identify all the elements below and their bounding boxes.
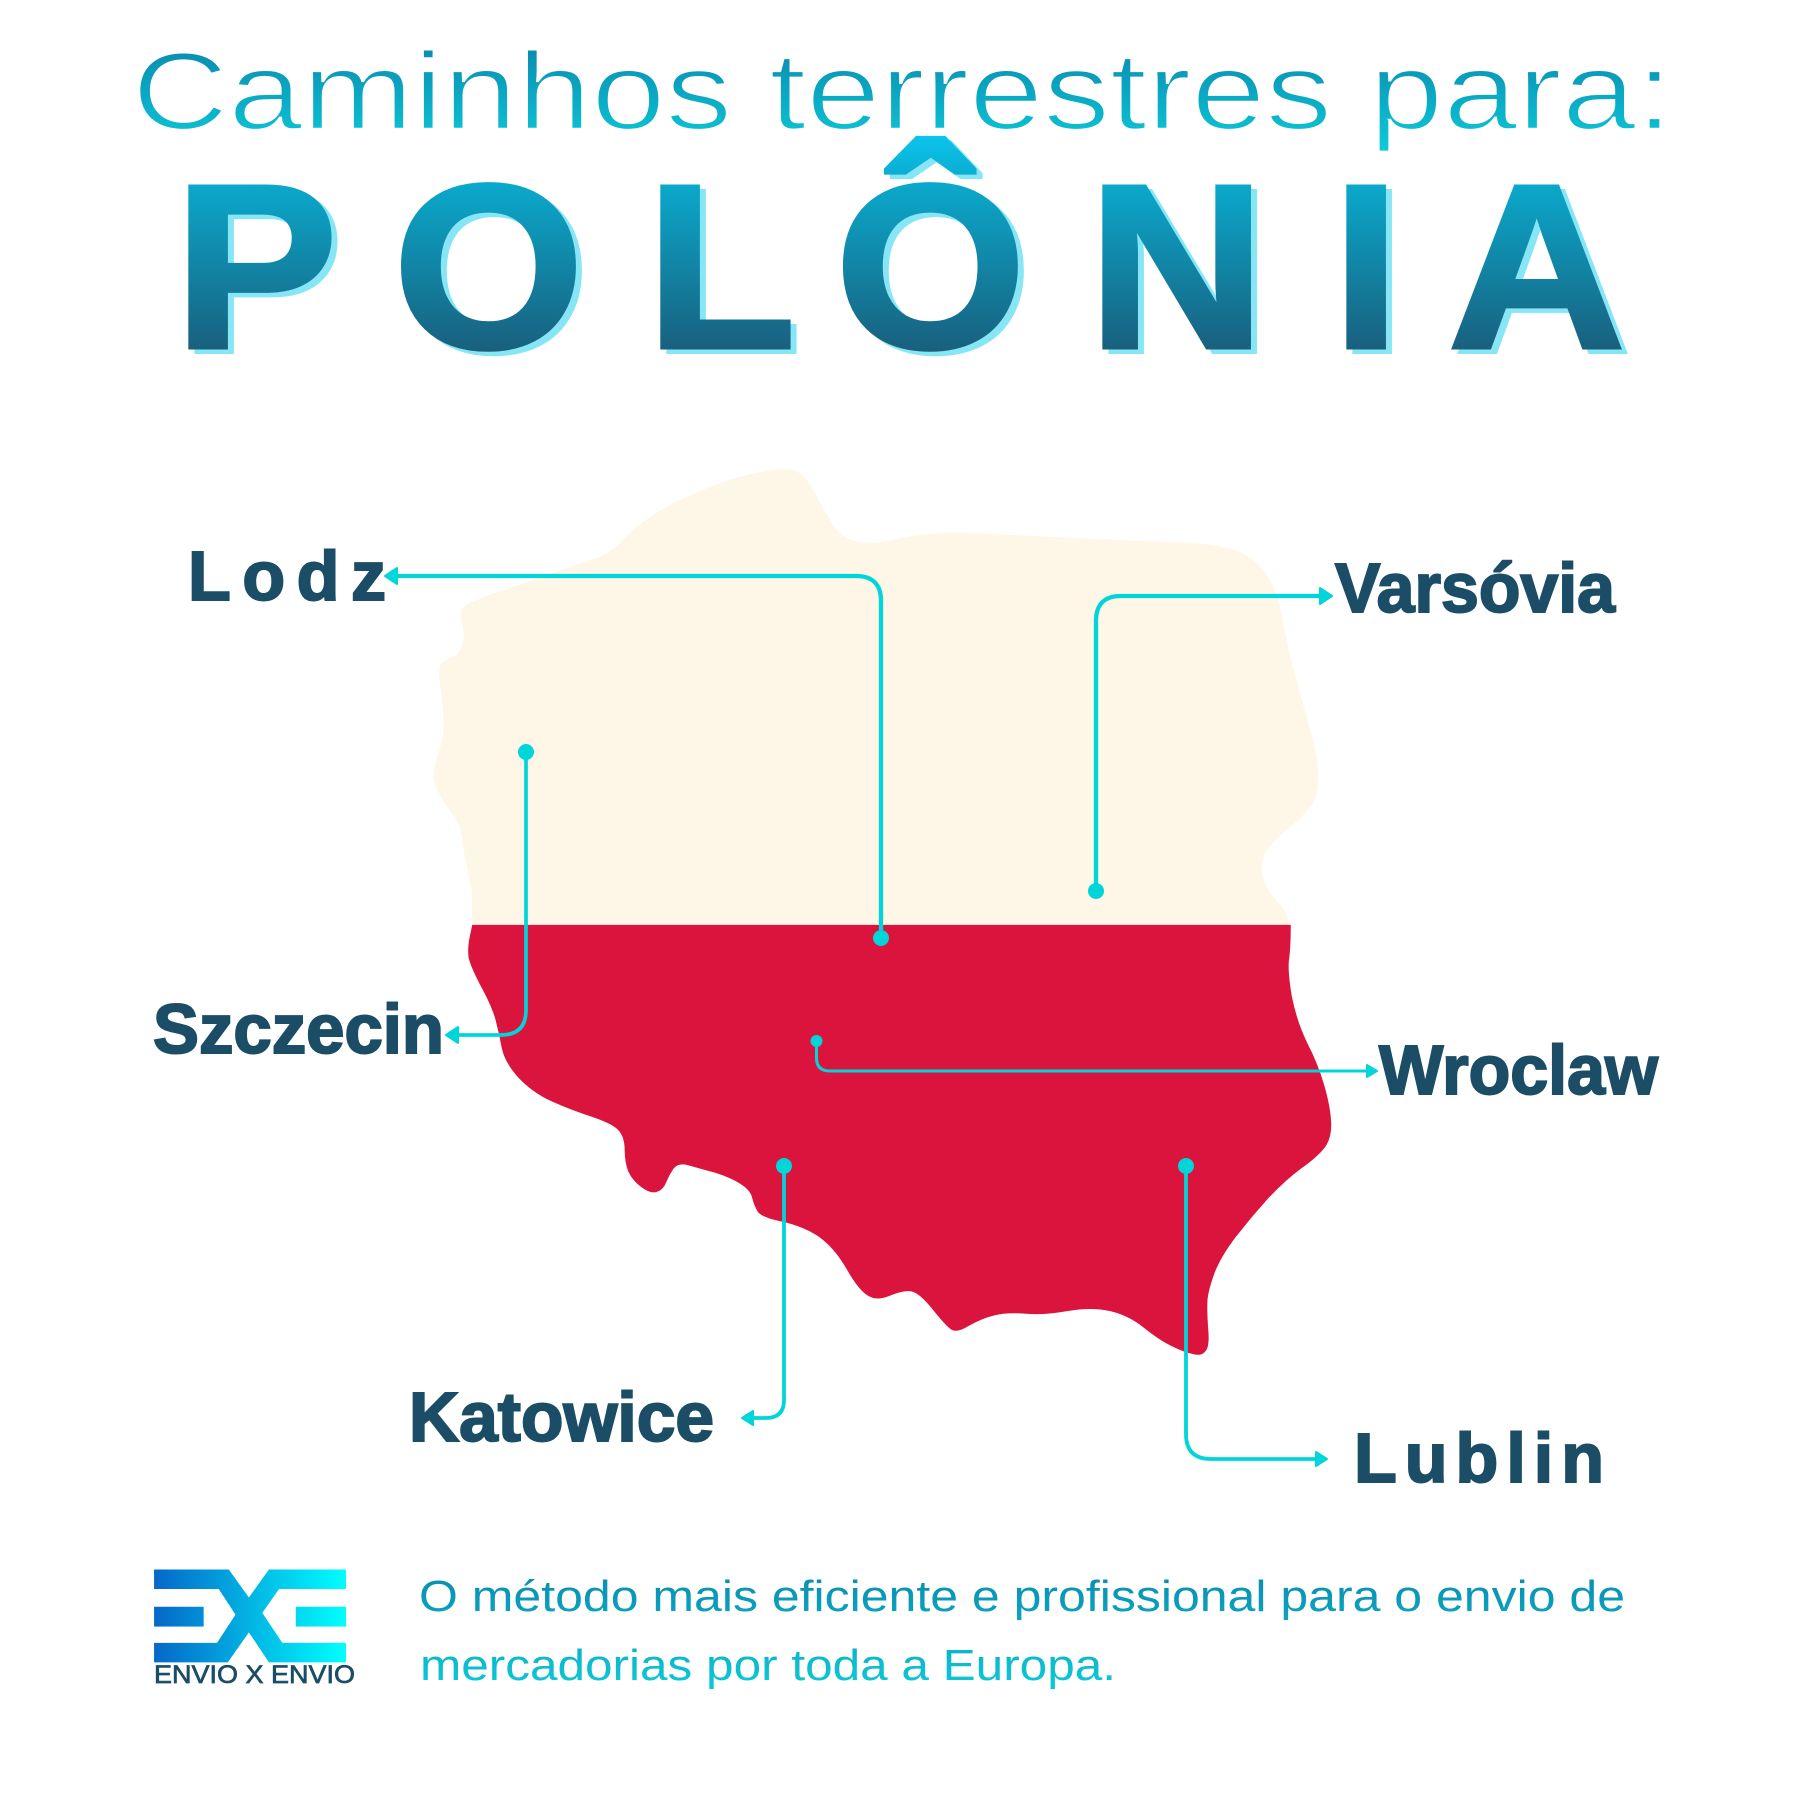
heading: POLÔNIA: POLÔNIA <box>180 140 1631 402</box>
label: Katowice: Katowice <box>409 1378 714 1456</box>
label: Varsóvia: Varsóvia <box>1335 549 1616 627</box>
tagline: O método mais eficiente e profissional para o envio de <box>419 1572 1625 1621</box>
connector: Lublin <box>1178 1158 1327 1466</box>
label: Lublin: Lublin <box>1354 1419 1604 1497</box>
title: Caminhos terrestres para: Caminhos terrestres para: <box>132 30 1673 153</box>
logo mark <box>154 1570 346 1662</box>
map: red flag band <box>468 925 1331 1355</box>
label: Wroclaw: Wroclaw <box>1379 1031 1659 1109</box>
connector: Lodz <box>385 568 889 946</box>
label: Szczecin: Szczecin <box>153 990 444 1068</box>
connector: Wroclaw <box>810 1035 1377 1077</box>
logo: Envio x Envio <box>154 1570 355 1689</box>
connector: Varsóvia <box>1088 588 1332 899</box>
connector: Katowice <box>742 1158 792 1425</box>
tagline: mercadorias por toda a Europa. <box>420 1641 1116 1690</box>
connector: Szczecin <box>446 744 534 1043</box>
map: white flag band <box>434 469 1318 925</box>
map of Poland with flag colours <box>434 469 1331 1355</box>
tagline <box>419 1572 1625 1690</box>
label: Lodz: Lodz <box>188 537 386 615</box>
heading: POLÔNIA: POLÔNIA <box>174 136 1625 397</box>
logo wordmark: ENVIO X ENVIO <box>154 1661 355 1689</box>
